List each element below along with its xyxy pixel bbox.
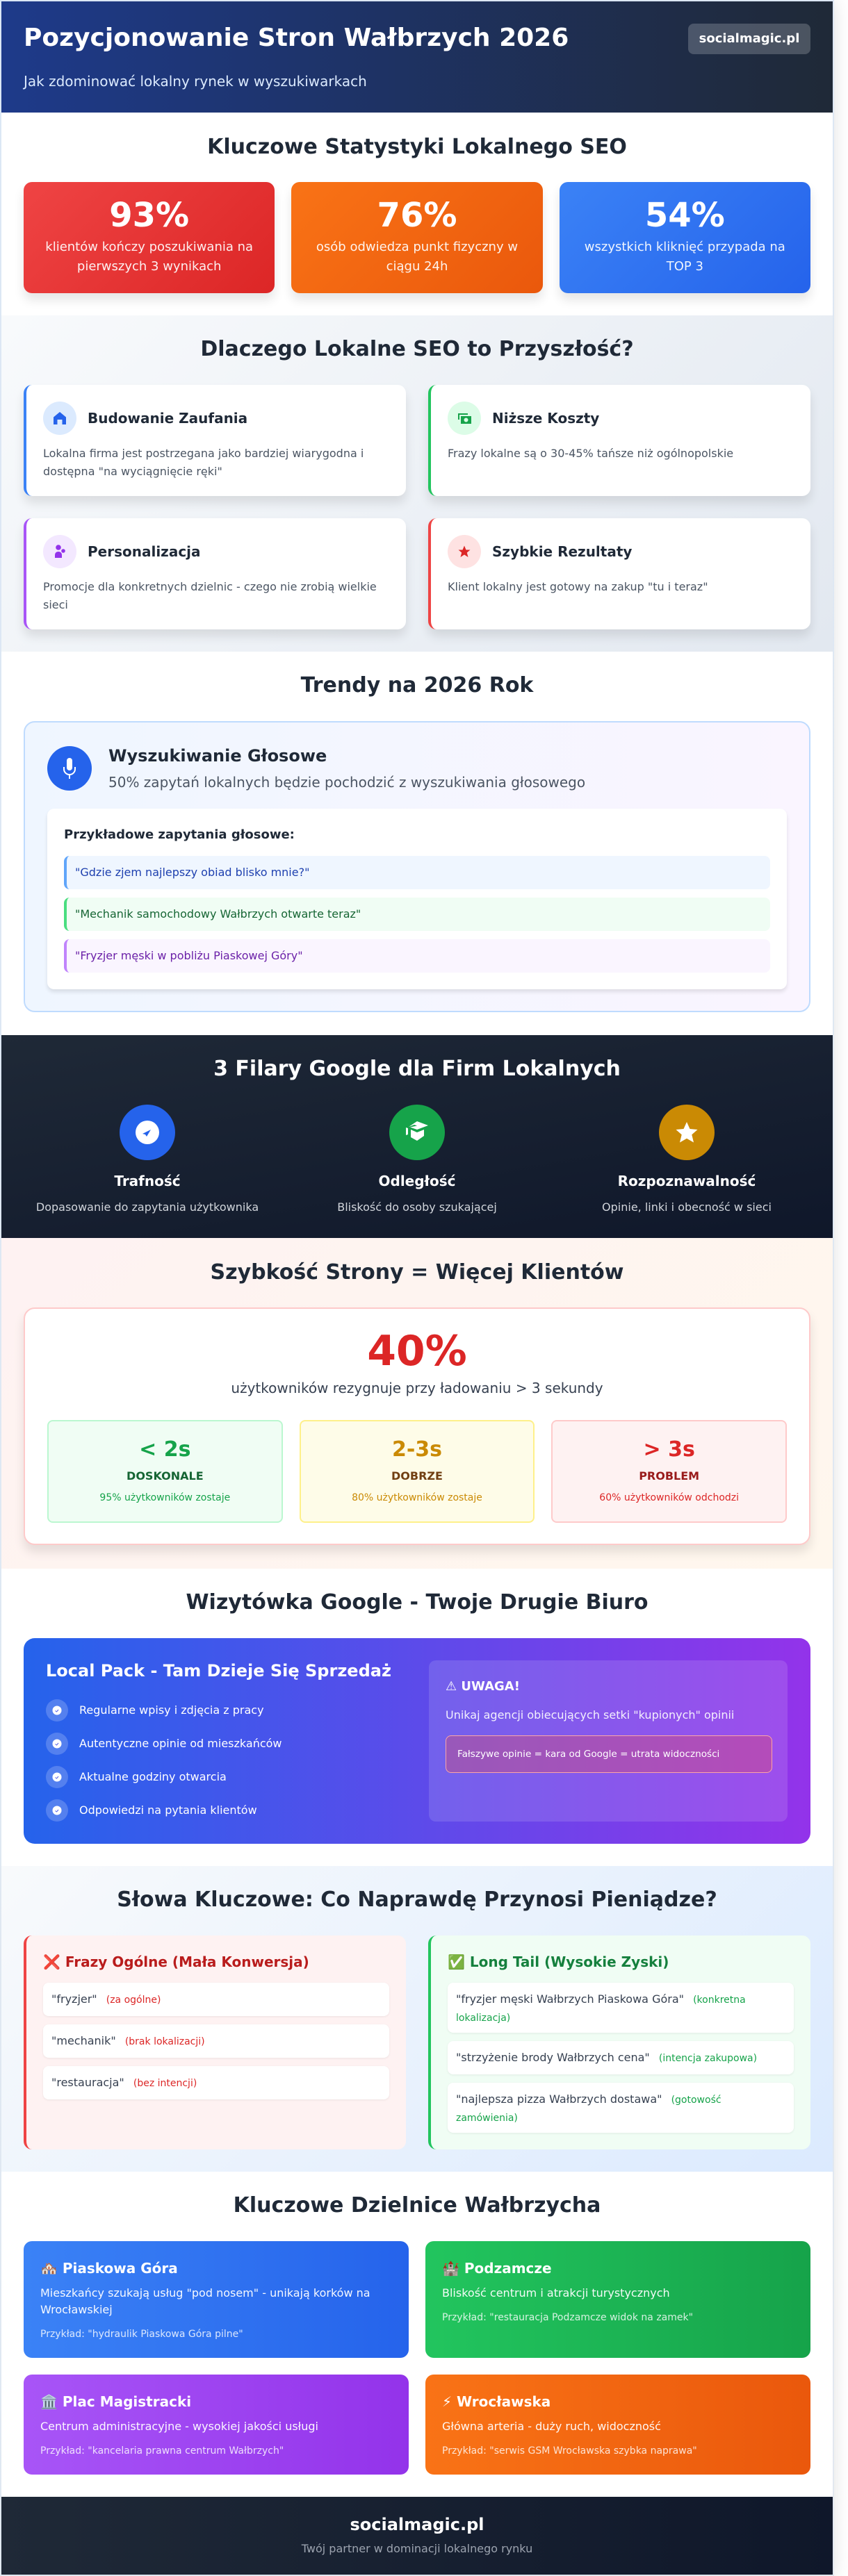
card: generic phrases [24,1935,406,2149]
long tail 3: zamówienia) [456,2112,518,2123]
stat card: 54%: TOP 3 [667,259,703,274]
panel: page speed [1,1238,833,1569]
keyword 2: "mechanik" (brak lokalizacji) [51,2034,205,2047]
heading: 3 Filary Google dla Firm Lokalnych [213,1057,621,1081]
examples box [47,809,787,989]
tier: 2-3s: 2-3s [392,1437,442,1462]
long tail 1: "fryzjer męski Wałbrzych Piaskowa Góra" (konkretna [456,1992,746,2006]
tier: 2-3s [300,1420,535,1523]
heading: Słowa Kluczowe: Co Naprawdę Przynosi Pieniądze? [117,1888,717,1912]
icon: house [43,402,76,435]
pillar: prominence: Opinie, linki i obecność w sieci [602,1200,772,1214]
warning title: ⚠ UWAGA! [446,1679,520,1694]
list item 1 [46,1699,264,1722]
panel: trends 2026 [1,652,833,1035]
footer brand: socialmagic.pl [350,2515,484,2534]
stat card: 76% [291,182,543,293]
card: fast results: Szybkie Rezultaty [492,543,632,560]
penalty callout [446,1735,772,1773]
speed card [24,1307,810,1545]
tier: under 2s: DOSKONALE [127,1469,204,1483]
pillar: distance: Bliskość do osoby szukającej [337,1200,497,1214]
icon: bullseye [120,1105,175,1160]
tier: under 2s: < 2s [139,1437,190,1462]
big stat 40%: 40% [367,1327,467,1376]
pillar: prominence [602,1105,772,1214]
panel: why local SEO [1,315,833,652]
subtitle: Jak zdominować lokalny rynek w wyszukiwarkach [24,73,367,90]
card: personalisation: sieci [43,598,68,611]
pillar: prominence: Rozpoznawalność [618,1173,756,1189]
card: personalisation: Promocje dla konkretnych dzielnic - czego nie zrobią wielkie [43,580,377,593]
stat card: 76%: osób odwiedza punkt fizyczny w [316,240,518,254]
list item 4 [46,1799,257,1822]
stat card: 76%: 76% [377,196,457,235]
tier: 2-3s: 80% użytkowników zostaje [352,1492,482,1503]
list item 4: Odpowiedzi na pytania klientów [79,1803,257,1817]
icon: money [448,402,481,435]
warning text: Unikaj agencji obiecujących setki "kupionych" opinii [446,1708,734,1722]
tier: 2-3s: DOBRZE [391,1469,443,1483]
card: fast results [428,518,810,629]
stat card: 54% [560,182,810,293]
list item 2: Autentyczne opinie od mieszkańców [79,1737,282,1750]
panel: key statistics [1,113,833,315]
icon: star [659,1105,715,1160]
stat card: 93%: 93% [109,196,189,235]
heading: Trendy na 2026 Rok [301,673,533,697]
keyword 3 [43,2066,389,2099]
district: Wrocławska: Przykład: "serwis GSM Wrocławska szybka naprawa" [442,2445,697,2457]
example query 3 [64,939,770,973]
panel: Google business profile [1,1569,833,1866]
card: personalisation: Personalizacja [88,543,201,560]
long tail 1: lokalizacja) [456,2012,510,2023]
district: Piaskowa Góra: 🏘️ Piaskowa Góra [40,2259,178,2276]
card: trust [24,385,406,496]
tier: over 3s [551,1420,787,1523]
heading: Wizytówka Google - Twoje Drugie Biuro [186,1590,649,1615]
local pack title: Local Pack - Tam Dzieje Się Sprzedaż [46,1661,391,1681]
example query 3: "Fryzjer męski w pobliżu Piaskowej Góry" [75,949,303,962]
stat card: 93%: klientów kończy poszukiwania na [45,240,253,254]
warning box [429,1660,788,1822]
stat card: 54%: 54% [645,196,725,235]
card: costs: Niższe Koszty [492,410,599,427]
big stat caption: użytkowników rezygnuje przy ładowaniu > 3 sekundy [231,1380,603,1396]
district: Podzamcze: 🏰 Podzamcze [442,2259,552,2276]
pillar: relevance: Dopasowanie do zapytania użytkownika [36,1200,259,1214]
district: Plac Magistracki: Centrum administracyjne - wysokiej jakości usługi [40,2420,318,2433]
card: long tail [428,1935,810,2149]
footer [1,2497,833,2575]
long tail 3: "najlepsza pizza Wałbrzych dostawa" (gotowość [456,2092,721,2106]
voice description: 50% zapytań lokalnych będzie pochodzić z wyszukiwania głosowego [108,774,585,791]
local pack card [24,1638,810,1844]
stat card: 93%: pierwszych 3 wynikach [77,259,221,274]
heading: Kluczowe Statystyki Lokalnego SEO [207,135,627,159]
pillar: relevance [36,1105,259,1214]
tier: under 2s: 95% użytkowników zostaje [99,1492,230,1503]
district: Podzamcze: Przykład: "restauracja Podzamcze widok na zamek" [442,2312,693,2323]
brand badge [688,24,810,54]
tier: over 3s: PROBLEM [639,1469,699,1483]
tier: under 2s [47,1420,283,1523]
icon: star [448,535,481,568]
header [1,1,833,113]
heading: Dlaczego Lokalne SEO to Przyszłość? [200,337,634,361]
district: Wrocławska: ⚡ Wrocławska [442,2393,551,2409]
example query 1 [64,856,770,889]
examples heading: Przykładowe zapytania głosowe: [64,827,295,842]
icon: users [43,535,76,568]
title: Pozycjonowanie Stron Wałbrzych 2026 [24,24,569,52]
card: long tail: ✅ Long Tail (Wysokie Zyski) [448,1954,669,1970]
long tail 2: "strzyżenie brody Wałbrzych cena" (intencja zakupowa) [456,2051,757,2064]
keyword 1 [43,1983,389,2016]
card: personalisation [24,518,406,629]
long tail 3 [448,2083,794,2133]
district: Piaskowa Góra: Mieszkańcy szukają usług "pod nosem" - unikają korków na [40,2286,370,2300]
district: Piaskowa Góra: Wrocławskiej [40,2303,113,2316]
card: fast results: Klient lokalny jest gotowy na zakup "tu i teraz" [448,580,708,593]
tier: over 3s: > 3s [644,1437,695,1462]
icon: graduation cap [389,1105,445,1160]
card: costs: Frazy lokalne są o 30-45% tańsze niż ogólnopolskie [448,447,733,460]
card: trust: Budowanie Zaufania [88,410,247,427]
list item 3: Aktualne godziny otwarcia [79,1770,227,1783]
example query 2: "Mechanik samochodowy Wałbrzych otwarte teraz" [75,907,361,920]
penalty callout: Fałszywe opinie = kara od Google = utrata widoczności [457,1749,719,1760]
list item 3 [46,1766,227,1788]
tier: over 3s: 60% użytkowników odchodzi [599,1492,739,1503]
district: Podzamcze: Bliskość centrum i atrakcji turystycznych [442,2286,670,2300]
panel: three pillars [1,1035,833,1238]
card: trust: Lokalna firma jest postrzegana jako bardziej wiarygodna i [43,447,364,460]
district: Plac Magistracki [24,2375,409,2475]
keyword 2 [43,2024,389,2058]
district: Plac Magistracki: Przykład: "kancelaria prawna centrum Wałbrzych" [40,2445,284,2457]
panel: districts [1,2172,833,2497]
keyword 1: "fryzjer" (za ogólne) [51,1992,161,2006]
keyword 3: "restauracja" (bez intencji) [51,2076,197,2089]
heading: Szybkość Strony = Więcej Klientów [210,1260,624,1285]
long tail 1 [448,1983,794,2033]
pillar: relevance: Trafność [114,1173,181,1189]
heading: Kluczowe Dzielnice Wałbrzycha [234,2193,601,2218]
footer tagline: Twój partner w dominacji lokalnego rynku [302,2542,532,2555]
long tail 2 [448,2041,794,2074]
stat card: 76%: ciągu 24h [386,259,448,274]
icon: microphone [47,746,92,791]
card: trust: dostępna "na wyciągnięcie ręki" [43,465,222,478]
voice title: Wyszukiwanie Głosowe [108,746,327,766]
district: Podzamcze [425,2241,810,2358]
card: costs [428,385,810,496]
voice search card [24,721,810,1012]
stat card: 93% [24,182,275,293]
pillar: distance [337,1105,497,1214]
panel: keywords [1,1866,833,2172]
district: Piaskowa Góra [24,2241,409,2358]
example query 2 [64,898,770,931]
district: Piaskowa Góra: Przykład: "hydraulik Piaskowa Góra pilne" [40,2329,243,2340]
district: Plac Magistracki: 🏛️ Plac Magistracki [40,2393,191,2409]
card: generic phrases: ❌ Frazy Ogólne (Mała Konwersja) [43,1954,309,1970]
district: Wrocławska [425,2375,810,2475]
pillar: distance: Odległość [378,1173,455,1189]
district: Wrocławska: Główna arteria - duży ruch, widoczność [442,2420,661,2433]
brand badge: socialmagic.pl [699,31,799,46]
stat card: 54%: wszystkich kliknięć przypada na [585,240,785,254]
list item 1: Regularne wpisy i zdjęcia z pracy [79,1703,264,1717]
list item 2 [46,1733,282,1755]
example query 1: "Gdzie zjem najlepszy obiad blisko mnie?" [75,866,309,879]
